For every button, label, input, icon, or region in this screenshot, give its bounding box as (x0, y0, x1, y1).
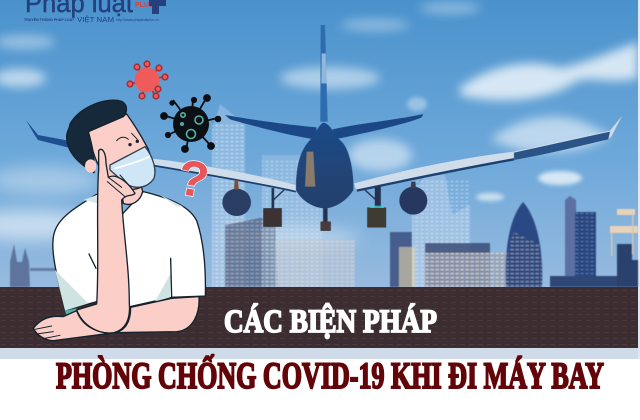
resting forearm and hand (115, 297, 199, 333)
left skyline: clock tower and bridge (10, 244, 30, 287)
icon: red virus (127, 61, 168, 99)
clouds (0, 2, 638, 249)
right wing (354, 116, 622, 192)
landing gear (263, 187, 386, 231)
city skyline (10, 104, 638, 287)
eyes (117, 137, 128, 141)
icon: black virus (161, 95, 220, 152)
tail fin (320, 25, 328, 122)
left wing tip behind the man (26, 120, 70, 148)
pale strip below the banner (0, 348, 638, 359)
t-shirt (53, 192, 205, 311)
right towers (565, 196, 577, 287)
illustration: man thinking with mask (33, 100, 205, 341)
sleeve teal (65, 308, 77, 317)
logo: Pháp Luật Plus: PLUS (135, 2, 154, 9)
ear (85, 159, 96, 173)
hair (67, 100, 126, 173)
raised forearm and hand (77, 149, 135, 333)
neck (120, 180, 143, 204)
engines (222, 189, 251, 216)
translucent tall towers (212, 104, 245, 287)
logo: Pháp Luật Plus (24, 0, 166, 24)
face mask (110, 147, 155, 187)
shirt shading (55, 270, 88, 311)
logo: Pháp Luật Plus: VIỆT NAM (77, 15, 114, 24)
heading: Các biện pháp: CÁC BIỆN PHÁP (224, 302, 437, 340)
face (88, 114, 155, 189)
logo: Pháp Luật Plus: http://www.phapluatplus.vn (116, 18, 159, 22)
Gherkin tower (506, 202, 542, 287)
bottom white strip (0, 359, 640, 420)
banner: dark translucent band (0, 287, 638, 348)
fuselage (296, 123, 353, 208)
horizontal stabilisers (225, 115, 317, 139)
airplane (150, 25, 622, 231)
logo: Pháp Luật Plus: TRUYỀN THÔNG PHÁP LUẬT (24, 17, 75, 22)
fingers (107, 175, 132, 197)
icon: question mark: ? (173, 149, 213, 209)
left wing (150, 158, 296, 192)
